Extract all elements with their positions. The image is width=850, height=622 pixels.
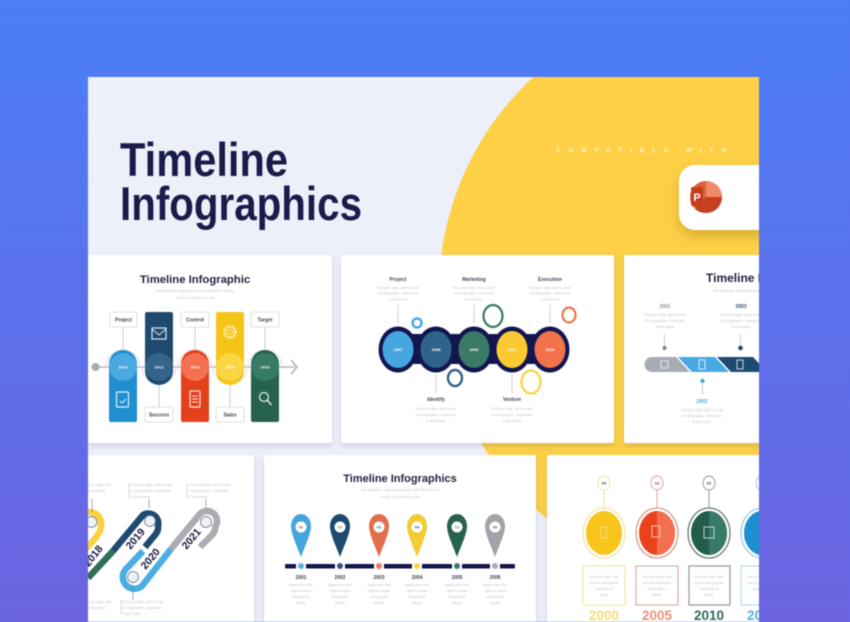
panel subtitle xyxy=(156,289,234,300)
compatible with label: COMPATIBLE WITH xyxy=(556,147,726,154)
pin years and notes: style to make xyxy=(290,589,312,593)
step 3 Control: 2014 xyxy=(191,364,200,370)
icon: PowerPoint logo: P xyxy=(693,192,701,204)
panel: circle milestones xyxy=(547,455,787,622)
pin years and notes: 2002 xyxy=(334,575,346,581)
year bubbles: 2010 xyxy=(508,347,517,352)
bottom labels xyxy=(415,397,533,423)
dashed connectors xyxy=(398,305,550,394)
year bubbles: 1997 xyxy=(394,347,403,352)
entry 2002 xyxy=(681,379,723,424)
step 4 Sales: 2016 xyxy=(226,364,235,370)
yellow circle xyxy=(440,76,760,519)
pin years and notes: style to make xyxy=(406,589,428,593)
panel subtitle xyxy=(361,488,439,499)
panel subtitle: Put awesome data that success with their first try xyxy=(361,488,439,492)
milestone 2005: text to infographic xyxy=(643,581,671,585)
ribbon notes: to infographic, customize xyxy=(131,489,171,493)
pin years and notes: Apply your text xyxy=(445,583,469,587)
panel title: Timeline Infographics xyxy=(706,271,830,285)
rotated years: 2019 xyxy=(124,526,148,552)
pin years and notes: infographic xyxy=(331,595,349,599)
year bubbles: 2020 xyxy=(546,347,555,352)
bottom labels: it and share xyxy=(427,419,445,423)
panel: diagonal ribbons xyxy=(87,455,256,622)
ribbon notes: Put your data, add a chart xyxy=(189,483,230,487)
ribbon notes: it and share xyxy=(131,495,150,499)
entry 2001: it and share xyxy=(656,325,674,329)
ribbon notes: infographic xyxy=(88,489,106,493)
milestone 2010 xyxy=(688,476,730,622)
entry 2003: to infographic, customize xyxy=(721,319,761,323)
entry 2002: 2002 xyxy=(696,399,708,405)
top labels: it and share xyxy=(541,298,559,302)
bottom labels: Venture xyxy=(503,397,521,403)
dashed timeline bar xyxy=(285,562,515,570)
bottom labels: Put your data, add a chart xyxy=(491,407,533,411)
arrow bar xyxy=(644,357,767,372)
pin years and notes: simple xyxy=(412,601,422,605)
ribbon notes xyxy=(88,483,230,616)
step 2 Success: Success xyxy=(149,412,169,418)
pin years and notes: simple xyxy=(490,601,500,605)
milestone 2005 xyxy=(636,476,678,622)
entry 2001: to infographic, customize xyxy=(645,319,685,323)
yellow ribbon xyxy=(87,508,106,552)
top labels xyxy=(377,277,571,302)
step 1 Project: Project xyxy=(115,318,132,324)
entry 2003 xyxy=(720,304,762,350)
pin years and notes: style to make xyxy=(368,589,390,593)
entry 2002: to infographic, customize xyxy=(682,414,722,418)
pin years and notes: 2003 xyxy=(373,575,385,581)
decorative rings xyxy=(412,305,576,394)
entry 2003: Put your data, add a chart xyxy=(720,313,762,317)
panel subtitle: Put awesome data that success with xyxy=(713,289,771,293)
pin years and notes: Apply your text xyxy=(328,583,352,587)
year bubbles: 1998 xyxy=(432,347,441,352)
ribbon notes: Put your data, add a chart xyxy=(122,600,163,604)
step 5 Target: Target xyxy=(258,318,273,324)
pin years and notes: style to make xyxy=(329,589,351,593)
milestone 2010: share xyxy=(704,593,714,597)
step 1 Project xyxy=(109,312,137,422)
milestone 2000: 04 xyxy=(602,480,607,486)
year bubbles xyxy=(382,331,566,368)
pin years and notes xyxy=(289,575,507,605)
top labels: Marketing xyxy=(462,277,486,283)
milestone 2010: 02 xyxy=(707,480,712,486)
pin years and notes: simple xyxy=(374,601,384,605)
top labels: Put your data, add a chart xyxy=(377,286,419,290)
milestone 2015 xyxy=(741,476,783,622)
milestone 2015: Put your data, add xyxy=(747,575,777,579)
navy ribbon xyxy=(113,513,158,551)
milestone 2015: customize it xyxy=(753,587,771,591)
pin years and notes: Apply your text xyxy=(367,583,391,587)
top labels: Put your data, add a chart xyxy=(529,286,571,290)
panel subtitle: in fact, very few of us do xyxy=(176,296,214,300)
map pins: 06 xyxy=(493,524,498,530)
pin years and notes: 2005 xyxy=(451,575,463,581)
bottom labels: Put your data, add a chart xyxy=(415,407,457,411)
connector lines xyxy=(106,327,282,407)
ribbon notes: it and share xyxy=(189,495,208,499)
entry 2003: 2003 xyxy=(735,304,747,310)
bottom labels: Identify xyxy=(427,397,445,403)
milestone 2000: Put your data, add xyxy=(589,575,619,579)
pin years and notes: infographic xyxy=(448,595,466,599)
year bubbles: 2000 xyxy=(470,347,479,352)
pin years and notes: infographic xyxy=(408,595,426,599)
top labels: to infographic, customize xyxy=(530,292,570,296)
map pins: 03 xyxy=(377,524,382,530)
pin years and notes: simple xyxy=(335,601,345,605)
blue ribbon xyxy=(123,549,171,589)
PowerPoint badge xyxy=(679,165,789,230)
ribbon notes: to infographic, customize xyxy=(122,606,162,610)
step 5 Target: 2018 xyxy=(261,364,270,370)
milestone 2000: customize it xyxy=(595,587,613,591)
entry 2001 xyxy=(644,304,686,350)
pin years and notes: 2006 xyxy=(489,575,501,581)
milestone 2005: customize it xyxy=(648,587,666,591)
pin years and notes: Apply your text xyxy=(289,583,313,587)
milestone 2010: text to infographic xyxy=(695,581,723,585)
pin years and notes: simple xyxy=(296,601,306,605)
map pins: 01 xyxy=(299,524,304,530)
pin years and notes: simple xyxy=(452,601,462,605)
milestone 2015: text to infographic xyxy=(748,581,776,585)
panel subtitle: in fact, very few of us do xyxy=(381,495,419,499)
ribbon notes: infographic xyxy=(88,606,106,610)
pin years and notes: 2004 xyxy=(411,575,423,581)
slide xyxy=(87,76,760,622)
pin years and notes: Apply your text xyxy=(483,583,507,587)
step 3 Control xyxy=(181,312,209,422)
panel subtitle: Put awesome data that success with their first try xyxy=(156,289,234,293)
title: Infographics xyxy=(120,177,362,230)
milestone 2000: text to infographic xyxy=(590,581,618,585)
step 1 Project: 2010 xyxy=(119,364,128,370)
top labels: Project xyxy=(390,277,407,283)
entry 2003: it and share xyxy=(732,325,750,329)
milestone 2010: Put your data, add xyxy=(694,575,724,579)
ribbon notes: to infographic, customize xyxy=(189,489,229,493)
top labels: to infographic, customize xyxy=(378,292,418,296)
rotated years xyxy=(87,528,202,570)
panel: map pin timeline xyxy=(264,455,536,622)
panel: arrow bar timeline xyxy=(622,254,760,448)
map pins: 02 xyxy=(338,524,343,530)
entry 2002: Put your data, add a chart xyxy=(681,408,723,412)
top labels: Execution xyxy=(538,277,562,283)
title: Timeline xyxy=(120,133,288,186)
step 2 Success: 2012 xyxy=(155,364,164,370)
map pins: 05 xyxy=(455,524,460,530)
pin years and notes: 2001 xyxy=(295,575,307,581)
pin years and notes: infographic xyxy=(292,595,310,599)
step 3 Control: Control xyxy=(186,318,204,324)
top labels: Put your data, add a chart xyxy=(453,286,495,290)
rotated years: 2018 xyxy=(82,543,106,569)
milestone 2005: Put your data, add xyxy=(642,575,672,579)
milestone 2000: share xyxy=(600,593,608,597)
top labels: to infographic, customize xyxy=(454,292,494,296)
title xyxy=(120,133,362,230)
panel title: Timeline Infographics xyxy=(343,473,457,485)
milestone 2000 xyxy=(583,476,625,622)
bottom labels: to infographic, customize xyxy=(416,413,456,417)
ribbon nodes xyxy=(86,516,212,582)
step 4 Sales: Sales xyxy=(223,412,237,418)
pin years and notes: infographic xyxy=(486,595,504,599)
milestone 2010: customize it xyxy=(700,587,718,591)
pin years and notes: Apply your text xyxy=(405,583,429,587)
step 5 Target xyxy=(251,312,279,422)
map pins xyxy=(291,514,505,557)
ribbon notes: your data, add xyxy=(88,483,111,487)
panel: ribbon timeline xyxy=(88,255,332,443)
ribbon notes: Put your data, add a chart xyxy=(131,483,172,487)
yellow slide edge xyxy=(640,77,759,277)
map pins: 04 xyxy=(415,524,420,530)
rotated years: 2020 xyxy=(139,546,163,572)
top labels: it and share xyxy=(465,298,483,302)
bottom labels: it and share xyxy=(503,419,521,423)
green ribbon xyxy=(88,551,113,578)
pin years and notes: style to make xyxy=(446,589,468,593)
milestone 2005: share xyxy=(652,593,662,597)
dark connected blob xyxy=(378,326,570,372)
bottom labels: to infographic, customize xyxy=(492,413,532,417)
step 2 Success xyxy=(145,312,173,422)
top labels: it and share xyxy=(389,298,407,302)
ribbon notes: your data, add xyxy=(88,600,111,604)
timeline axis arrow xyxy=(92,360,297,374)
entry 2002: it and share xyxy=(693,420,711,424)
milestone 2005: 03 xyxy=(655,480,660,486)
entry 2001: Put your data, add a chart xyxy=(644,313,686,317)
grey ribbon xyxy=(171,511,217,549)
panel: bubble timeline xyxy=(341,255,614,443)
entry 2001: 2001 xyxy=(659,304,671,310)
pin years and notes: infographic xyxy=(370,595,388,599)
step 4 Sales xyxy=(216,312,244,422)
pin years and notes: style to make xyxy=(484,589,506,593)
rotated years: 2021 xyxy=(180,526,204,552)
panel title: Timeline Infographic xyxy=(140,274,250,286)
ribbon notes: it and share xyxy=(122,612,141,616)
